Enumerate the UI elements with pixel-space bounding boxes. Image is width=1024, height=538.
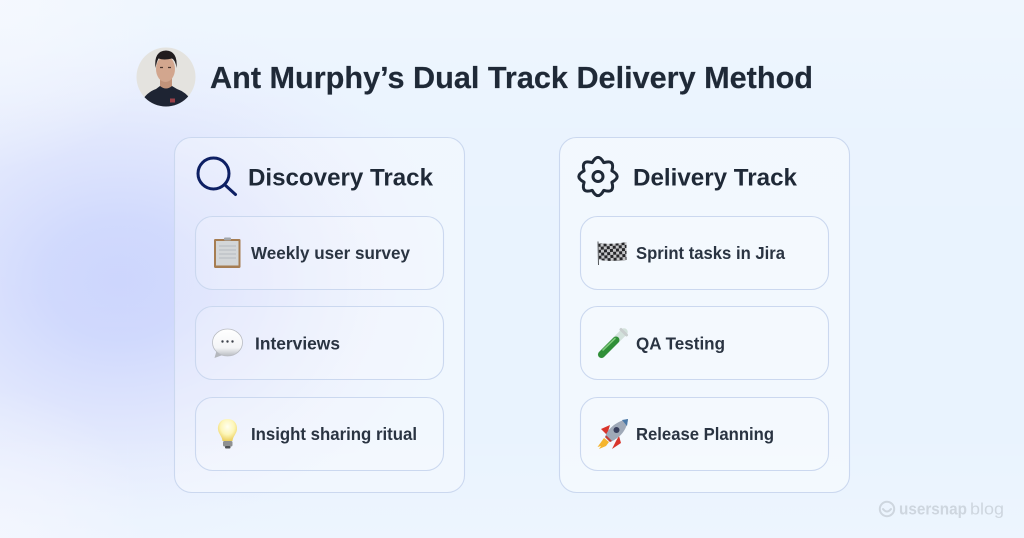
logo text: usersnap: [899, 500, 967, 518]
label: Interviews: [255, 334, 340, 354]
card: interviews: [196, 306, 444, 380]
card: insight sharing ritual: [196, 398, 444, 470]
icon: magnifying glass: [198, 158, 236, 194]
label: Release Planning: [636, 424, 774, 444]
icon: speech bubble: [212, 329, 242, 358]
label: Weekly user survey: [251, 243, 410, 263]
panel: discovery track: [174, 138, 464, 492]
panel: delivery track: [560, 138, 850, 492]
heading: discovery track: Discovery Track: [248, 164, 433, 192]
label: QA Testing: [636, 334, 725, 354]
card: release planning: [580, 398, 828, 470]
card: sprint tasks in jira: [580, 216, 828, 290]
icon: test tube: [602, 330, 626, 354]
icon: rocket: [598, 419, 628, 449]
icon: clipboard: [214, 238, 240, 268]
icon: gear: [579, 157, 617, 196]
logo icon: [880, 502, 894, 516]
logo text: blog: [970, 500, 1004, 518]
card: weekly user survey: [196, 216, 444, 290]
logo: usersnap blog: [880, 500, 1004, 518]
icon: light bulb: [218, 419, 237, 448]
icon: chequered flag: [598, 242, 626, 265]
heading: delivery track: Delivery Track: [633, 164, 797, 192]
label: Insight sharing ritual: [251, 424, 417, 444]
avatar photo: [136, 47, 196, 108]
label: Sprint tasks in Jira: [636, 243, 785, 263]
title: Ant Murphy’s Dual Track Delivery Method: [210, 61, 813, 95]
card: qa testing: [580, 306, 828, 380]
